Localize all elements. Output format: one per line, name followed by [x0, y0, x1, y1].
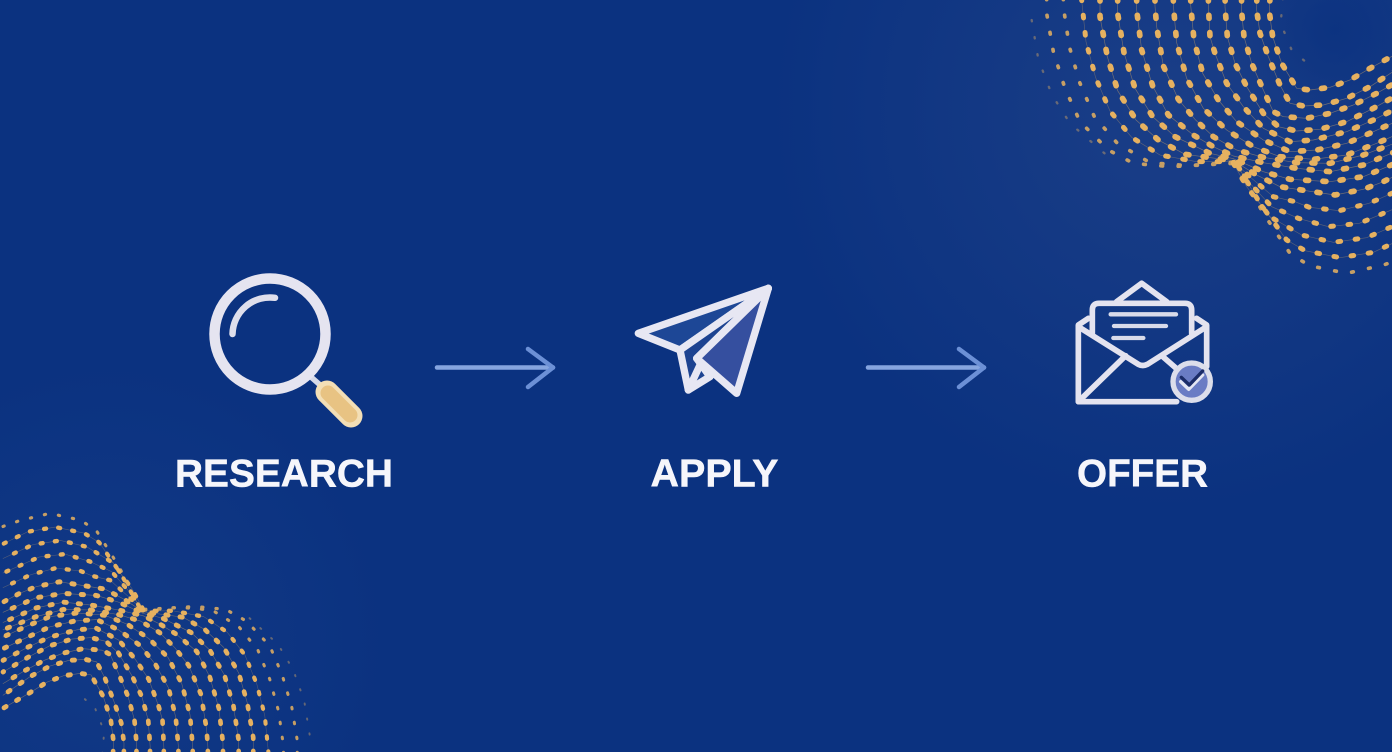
- magnifier neck: [311, 377, 327, 391]
- dot wave pattern: top right: [1032, 0, 1392, 273]
- arrow: apply to offer: [868, 349, 984, 387]
- icon: paper plane: [638, 288, 768, 393]
- magnifier lens highlight: [232, 297, 275, 334]
- plane right wing: [697, 288, 768, 393]
- plane top wing: [638, 288, 768, 350]
- envelope body: [1078, 318, 1207, 402]
- label: research: RESEARCH: [175, 452, 393, 496]
- magnifier handle: [327, 392, 351, 416]
- dot wave pattern: bottom left: [3, 513, 310, 752]
- plane fold line: [688, 365, 700, 390]
- plane tail fold: [680, 288, 768, 390]
- envelope front fold: [1078, 327, 1207, 365]
- label: apply: APPLY: [650, 452, 778, 496]
- letter sheet: [1092, 303, 1192, 333]
- envelope flap: [1117, 283, 1167, 302]
- letter text lines: [1111, 314, 1176, 338]
- magnifier lens ring: [214, 278, 326, 390]
- icon: open envelope with check badge: [1078, 283, 1210, 402]
- label: offer: OFFER: [1077, 452, 1208, 496]
- check badge: [1173, 363, 1210, 400]
- envelope lower diagonals: [1078, 356, 1180, 402]
- icon: magnifying glass: [214, 278, 351, 416]
- arrow: research to apply: [437, 349, 553, 387]
